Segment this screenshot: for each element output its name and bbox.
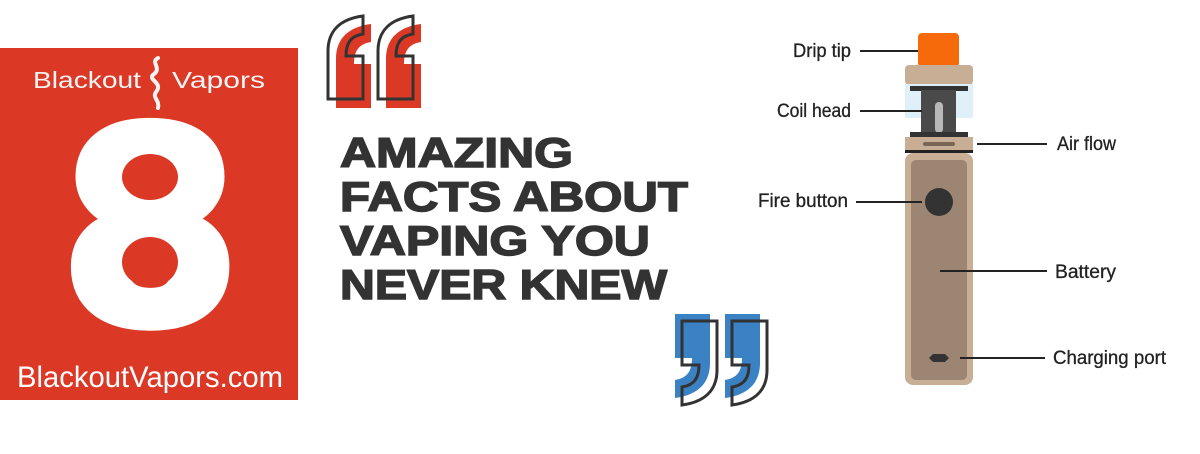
diagram: vape pen [905,33,973,385]
title: FACTS ABOUT [340,173,688,220]
title [340,129,688,308]
icon: closing quotes [675,314,767,405]
logo text: Vapors [172,67,265,93]
labels: diagram callouts: Charging port [1053,348,1167,369]
charging port [929,354,949,362]
tank [905,84,973,118]
website url: BlackoutVapors.com [17,361,283,394]
title: AMAZING [340,129,573,176]
labels: diagram callouts: Air flow [1057,134,1116,155]
drip tip [918,33,959,67]
labels: diagram callouts: Drip tip [793,41,851,62]
air flow collar [905,137,973,151]
title: VAPING YOU [340,217,650,264]
logo text [33,58,265,108]
logo text: Blackout [33,67,142,93]
panel: red brand box [0,48,298,400]
labels: diagram callouts [758,41,1167,369]
title: NEVER KNEW [340,261,667,308]
fire button [925,188,953,216]
labels: diagram callouts: Battery [1055,262,1116,283]
labels: diagram callouts: Fire button [758,191,848,212]
big number 8: 8 [70,68,230,379]
top cap [905,65,973,85]
battery body [905,153,973,385]
labels: diagram callouts: Coil head [777,101,851,122]
icon: opening quotes [328,16,421,108]
coil head [910,86,968,137]
